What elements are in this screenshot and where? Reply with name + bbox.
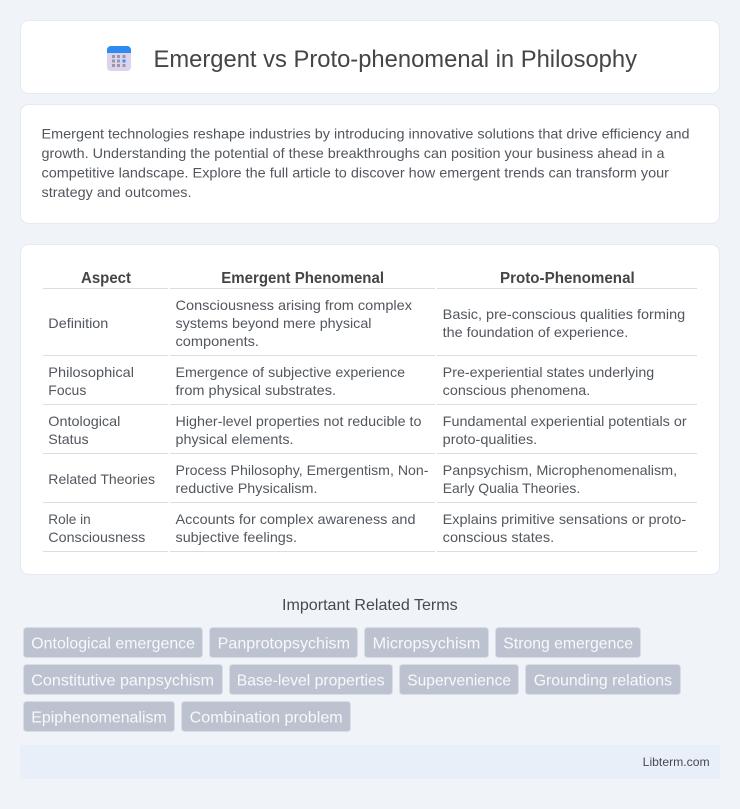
chip: Constitutive panpsychism (24, 664, 222, 694)
chip: Supervenience: Supervenience (407, 672, 511, 689)
table header row (43, 270, 697, 289)
row: Role in Consciousness (43, 511, 697, 552)
row: Role in Consciousness: Consciousness (48, 529, 145, 545)
panel: title header (20, 20, 720, 94)
panel: related term chips (24, 628, 680, 732)
row: Philosophical Focus: Focus (48, 382, 86, 398)
row: Philosophical Focus: Emergence of subjective experience (176, 364, 405, 380)
intro text block: strategy and outcomes. (42, 184, 191, 200)
row: Definition: the foundation of experience. (443, 324, 628, 340)
chip: Strong emergence: Strong emergence (503, 635, 633, 652)
row: Related Theories: Panpsychism, Microphenomenalism, (443, 462, 677, 478)
heading: important related terms: Important Related Terms (282, 597, 458, 614)
row: Role in Consciousness: conscious states. (443, 529, 554, 545)
chip: Constitutive panpsychism: Constitutive panpsychism (31, 672, 214, 689)
row: Philosophical Focus (43, 364, 697, 405)
chip: Panprotopsychism: Panprotopsychism (218, 635, 350, 652)
chip: Strong emergence (496, 628, 640, 658)
footer bar (20, 745, 720, 779)
table header row: Proto-Phenomenal (500, 270, 635, 287)
row: Related Theories: Process Philosophy, Emergentism, Non- (176, 462, 429, 478)
chip: Grounding relations (526, 664, 680, 694)
row: Definition (43, 297, 697, 356)
row: Related Theories: Related Theories (48, 471, 155, 487)
row: Ontological Status (43, 413, 697, 454)
chip: Grounding relations: Grounding relations (534, 672, 672, 689)
intro text block: Emergent technologies reshape industries by introducing innovative solutions that drive efficiency and (42, 126, 690, 142)
footer text: site name: Libterm.com (643, 755, 710, 769)
intro text block (42, 126, 690, 200)
panel: comparison table (20, 244, 720, 574)
row: Ontological Status: Ontological (48, 413, 120, 429)
row: Philosophical Focus: conscious phenomena. (443, 382, 590, 398)
row: Ontological Status: Higher-level properties not reducible to (176, 413, 422, 429)
chip: Epiphenomenalism (24, 702, 174, 732)
chip: Combination problem: Combination problem (190, 709, 343, 726)
chip: Micropsychism (364, 628, 488, 658)
chip: Ontological emergence: Ontological emergence (31, 635, 195, 652)
intro text block: competitive landscape. Explore the full article to discover how emergent trends can transform your (42, 164, 669, 180)
row: Ontological Status: Status (48, 431, 89, 447)
row: Role in Consciousness: subjective feelings. (176, 529, 297, 545)
row: Role in Consciousness: Role in (48, 511, 91, 527)
row: Related Theories: Early Qualia Theories. (443, 480, 580, 496)
row: Definition: Consciousness arising from complex (176, 297, 412, 313)
chip: Panprotopsychism (210, 628, 358, 658)
row: Definition: Basic, pre-conscious qualities forming (443, 306, 685, 322)
chip: Base-level properties (230, 664, 392, 694)
table header row: Aspect (81, 270, 132, 287)
chip: Supervenience (400, 664, 518, 694)
chip: Ontological emergence (24, 628, 202, 658)
row: Ontological Status: Fundamental experiential potentials or (443, 413, 687, 429)
row: Definition: systems beyond mere physical (176, 315, 372, 331)
chip: Micropsychism: Micropsychism (373, 635, 480, 652)
row: Definition: Definition (48, 315, 108, 331)
table header row: Emergent Phenomenal (221, 270, 384, 287)
row: Ontological Status: proto-qualities. (443, 431, 537, 447)
row: Role in Consciousness: Accounts for complex awareness and (176, 511, 416, 527)
row: Philosophical Focus: Pre-experiential states underlying (443, 364, 654, 380)
chip: Base-level properties: Base-level properties (237, 672, 385, 689)
title: Emergent vs Proto-phenomenal in Philosophy (154, 46, 637, 73)
icon: calendar (107, 46, 131, 71)
row: Ontological Status: physical elements. (176, 431, 294, 447)
chip: Combination problem (182, 702, 350, 732)
chip: Epiphenomenalism: Epiphenomenalism (31, 709, 167, 726)
row: Philosophical Focus: Philosophical (48, 364, 134, 380)
row: Related Theories: reductive Physicalism. (176, 480, 318, 496)
intro text block: growth. Understanding the potential of these breakthroughs can position your business ahead in a (42, 145, 665, 161)
row: Philosophical Focus: from physical substrates. (176, 382, 336, 398)
row: Related Theories (43, 462, 697, 503)
row: Definition: components. (176, 333, 259, 349)
row: Role in Consciousness: Explains primitive sensations or proto- (443, 511, 687, 527)
panel: introduction (20, 104, 720, 224)
